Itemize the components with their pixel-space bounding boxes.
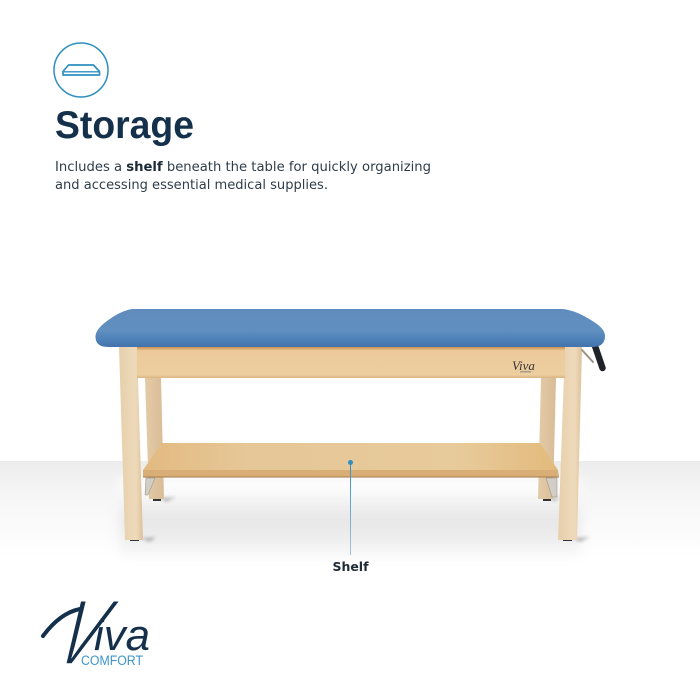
side lever [582, 346, 602, 368]
apron [137, 347, 565, 378]
logo: Viva Comfort: COMFORT [81, 653, 143, 668]
floor background [0, 461, 700, 560]
table shadows [140, 497, 590, 542]
logo: Viva Comfort: iva [94, 611, 150, 660]
icon: shelf in circle [54, 43, 108, 97]
callout: shelf [332, 460, 369, 574]
small logo on apron: Viva [512, 358, 535, 373]
description text: and accessing essential medical supplies. [55, 178, 328, 193]
front left leg [119, 347, 143, 540]
front right leg [558, 347, 582, 540]
title: Storage [55, 104, 194, 147]
back right leg [538, 378, 556, 499]
shelf [143, 443, 559, 478]
padded top [95, 309, 605, 347]
exam table [95, 309, 605, 542]
back left leg [145, 378, 164, 499]
description text [55, 160, 431, 193]
description text: Includes a shelf beneath the table for quickly organizing [55, 160, 431, 175]
logo: Viva Comfort: V [44, 582, 127, 684]
shelf brackets [145, 478, 557, 497]
callout: shelf: Shelf [332, 559, 369, 574]
feet [130, 499, 572, 541]
